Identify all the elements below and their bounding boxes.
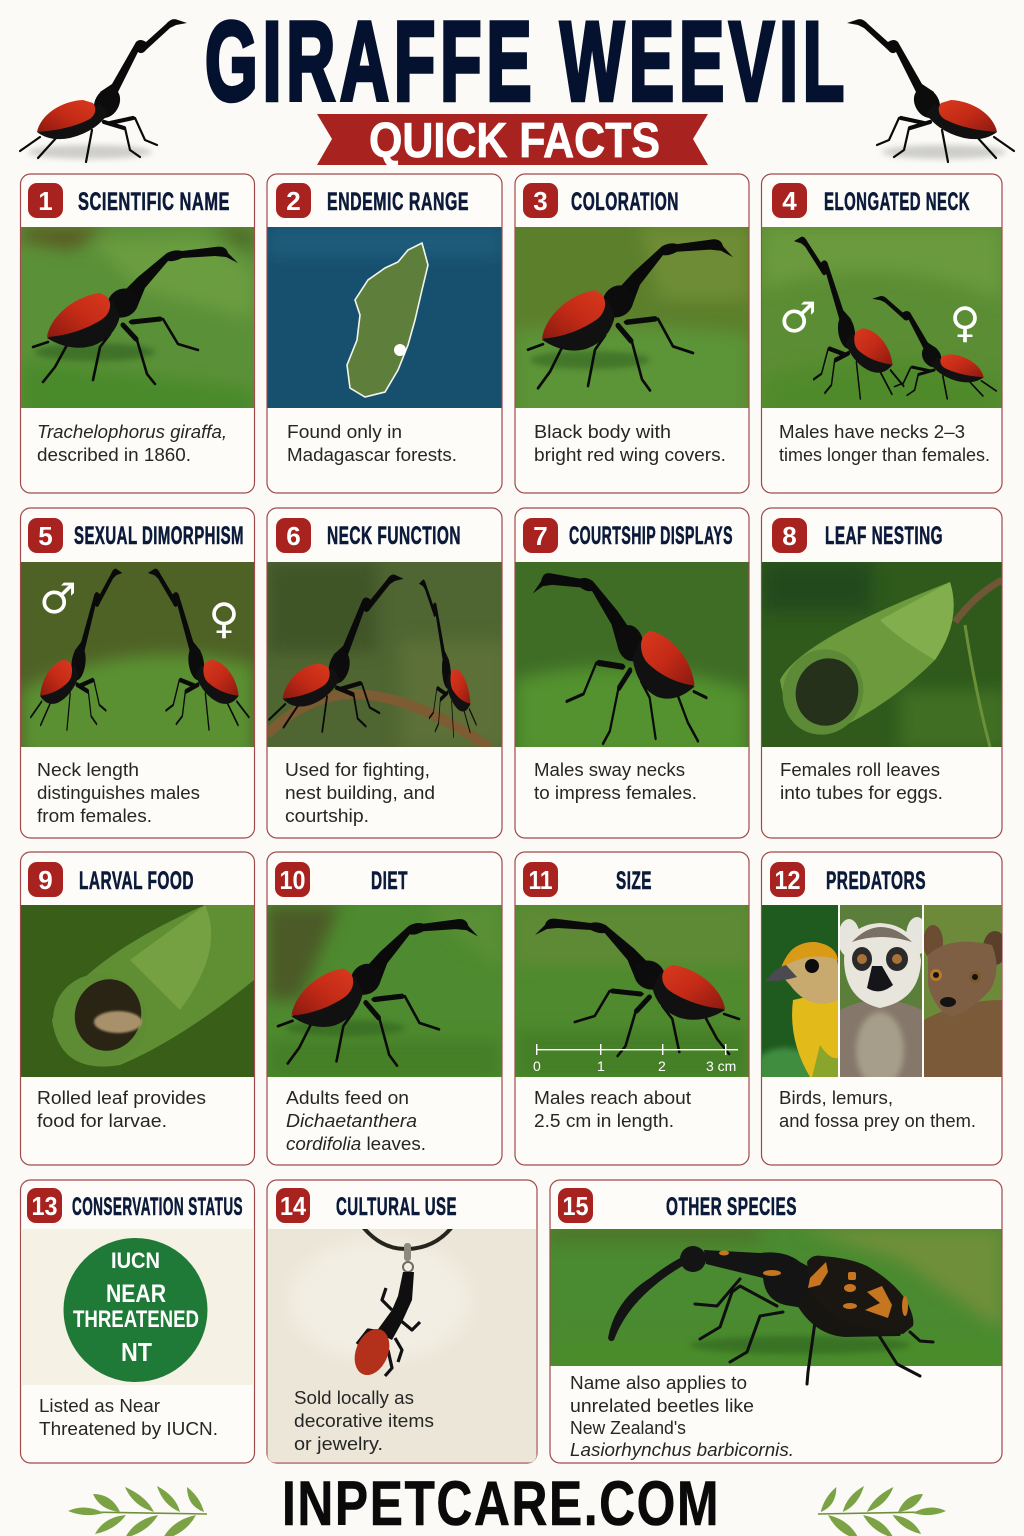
description: Rolled leaf provides bbox=[37, 1087, 206, 1108]
card frame bbox=[515, 508, 749, 838]
image: rolled leaf nest bbox=[762, 562, 1002, 747]
heading: CULTURAL USE bbox=[336, 1193, 457, 1221]
heading: LARVAL FOOD bbox=[79, 867, 194, 895]
symbol: male: ♂ bbox=[779, 293, 817, 342]
panel: 1 scientific name bbox=[20, 174, 254, 493]
IUCN status badge: NEAR bbox=[106, 1280, 166, 1308]
heading: SCIENTIFIC NAME bbox=[78, 188, 230, 216]
description: courtship. bbox=[285, 805, 369, 826]
number badge: 11 bbox=[528, 865, 552, 895]
description: Listed as Near bbox=[39, 1395, 160, 1416]
description: from females. bbox=[37, 805, 152, 826]
description: 2.5 cm in length. bbox=[534, 1110, 674, 1131]
icon: right leaf spray bbox=[818, 1486, 946, 1536]
heading: LEAF NESTING bbox=[825, 522, 943, 550]
description: Males reach about bbox=[534, 1087, 691, 1108]
number badge: 2 bbox=[286, 186, 301, 216]
image: weevil on leaf bbox=[516, 227, 748, 408]
card frame bbox=[267, 1180, 537, 1463]
image: fossa predator bbox=[924, 905, 1002, 1077]
card frame bbox=[20, 1180, 254, 1463]
panel: 3 coloration bbox=[515, 174, 749, 493]
number badge: 14 bbox=[280, 1191, 306, 1221]
card frame bbox=[267, 852, 502, 1165]
necklace cord bbox=[363, 1227, 452, 1249]
heading: SIZE bbox=[616, 867, 652, 895]
description: distinguishes males bbox=[37, 782, 200, 803]
card frame bbox=[762, 174, 1002, 493]
number badge: 6 bbox=[286, 521, 301, 551]
panel: 14 cultural use bbox=[267, 1180, 537, 1463]
heading: COLORATION bbox=[571, 188, 679, 216]
description bbox=[37, 759, 200, 826]
panel: 12 predators bbox=[753, 852, 1007, 1165]
description: Madagascar forests. bbox=[287, 444, 457, 465]
symbol: male: ♂ bbox=[39, 574, 77, 623]
icon: giraffe weevil left bbox=[20, 19, 187, 162]
card frame bbox=[762, 852, 1002, 1165]
number badge: 3 bbox=[533, 186, 548, 216]
image: weevil feeding on leaf bbox=[268, 905, 502, 1077]
IUCN status badge: THREATENED bbox=[73, 1306, 199, 1333]
number badge bbox=[523, 518, 558, 553]
ruler: 3 cm bbox=[706, 1058, 736, 1074]
description: Lasiorhynchus barbicornis. bbox=[570, 1439, 794, 1460]
image: leaf background bbox=[550, 1229, 1002, 1366]
number badge: 9 bbox=[38, 865, 53, 895]
number badge bbox=[28, 183, 63, 218]
pendant weevil bbox=[348, 1272, 420, 1380]
description bbox=[294, 1387, 434, 1454]
image: weevil on leaf bbox=[21, 227, 254, 408]
card frame bbox=[267, 174, 502, 493]
description: Found only in bbox=[287, 421, 402, 442]
description bbox=[534, 1087, 691, 1131]
description: Trachelophorus giraffa, bbox=[37, 421, 227, 442]
number badge bbox=[276, 518, 311, 553]
ruler bbox=[533, 1044, 738, 1074]
description: Females roll leaves bbox=[780, 759, 940, 780]
card frame bbox=[20, 174, 254, 493]
description: and fossa prey on them. bbox=[779, 1110, 976, 1131]
panel: 9 larval food bbox=[20, 852, 254, 1165]
panel: 6 neck function bbox=[267, 508, 510, 838]
description bbox=[780, 759, 943, 803]
ribbon: quick facts: QUICK FACTS bbox=[369, 114, 660, 168]
number badge bbox=[523, 183, 558, 218]
description: into tubes for eggs. bbox=[780, 782, 943, 803]
card frame bbox=[267, 508, 502, 838]
description: Birds, lemurs, bbox=[779, 1087, 893, 1108]
card frame bbox=[20, 852, 254, 1165]
image: weevil pendant on cream bbox=[268, 1229, 536, 1462]
panel: 11 size bbox=[515, 852, 749, 1165]
heading: CONSERVATION STATUS bbox=[72, 1193, 243, 1221]
number badge: 8 bbox=[782, 521, 797, 551]
heading: NECK FUNCTION bbox=[327, 522, 461, 550]
panel: 7 courtship displays bbox=[515, 508, 749, 838]
description bbox=[37, 1087, 206, 1131]
number badge: 12 bbox=[774, 865, 800, 895]
description: described in 1860. bbox=[37, 444, 191, 465]
image: male and female weevils bbox=[21, 562, 254, 747]
description: cordifolia leaves. bbox=[286, 1133, 426, 1154]
symbol: female: ♀ bbox=[209, 594, 239, 643]
icon: left leaf spray bbox=[68, 1486, 207, 1536]
illustration: barbicornis weevil bbox=[608, 1246, 933, 1384]
description: or jewelry. bbox=[294, 1433, 383, 1454]
description: Used for fighting, bbox=[285, 759, 430, 780]
panel: 5 sexual dimorphism bbox=[20, 508, 254, 838]
image: weevil with ruler bbox=[516, 905, 748, 1077]
image: bird predator bbox=[762, 905, 838, 1077]
header bbox=[20, 0, 1014, 168]
card frame bbox=[550, 1180, 1002, 1463]
description bbox=[779, 1087, 976, 1131]
number badge bbox=[772, 183, 807, 218]
ruler: 0 bbox=[533, 1058, 541, 1074]
description: Sold locally as bbox=[294, 1387, 414, 1408]
description bbox=[534, 759, 697, 803]
description: decorative items bbox=[294, 1410, 434, 1431]
map: Madagascar bbox=[268, 227, 502, 408]
panel: 4 elongated neck bbox=[762, 174, 1002, 493]
number badge: 13 bbox=[32, 1191, 58, 1221]
card frame bbox=[762, 508, 1002, 838]
panel: 2 endemic range bbox=[267, 174, 502, 493]
number badge bbox=[523, 862, 558, 897]
number badge: 10 bbox=[280, 865, 306, 895]
description: Males have necks 2–3 bbox=[779, 421, 965, 442]
description: Threatened by IUCN. bbox=[39, 1418, 218, 1439]
heading: OTHER SPECIES bbox=[666, 1193, 797, 1221]
number badge: 1 bbox=[38, 186, 53, 216]
description: Neck length bbox=[37, 759, 139, 780]
number badge bbox=[28, 518, 63, 553]
panel: 10 diet bbox=[267, 852, 502, 1165]
heading: COURTSHIP DISPLAYS bbox=[569, 522, 733, 550]
description: Males sway necks bbox=[534, 759, 685, 780]
description: to impress females. bbox=[534, 782, 697, 803]
description bbox=[534, 421, 726, 465]
number badge: 5 bbox=[38, 521, 53, 551]
IUCN status badge: IUCN bbox=[111, 1248, 160, 1273]
IUCN status badge bbox=[64, 1238, 208, 1382]
image: weevil swaying neck bbox=[516, 562, 748, 747]
IUCN status badge: NT bbox=[121, 1337, 152, 1367]
card frame bbox=[515, 852, 749, 1165]
description: Dichaetanthera bbox=[286, 1110, 417, 1131]
card frame bbox=[20, 508, 254, 838]
heading: PREDATORS bbox=[826, 867, 926, 895]
description bbox=[570, 1372, 794, 1460]
heading: DIET bbox=[371, 867, 408, 895]
description bbox=[285, 759, 435, 826]
number badge: 7 bbox=[533, 521, 548, 551]
image: male and female weevils bbox=[762, 227, 1002, 408]
description bbox=[286, 1087, 426, 1154]
description: nest building, and bbox=[285, 782, 435, 803]
description: bright red wing covers. bbox=[534, 444, 726, 465]
number badge bbox=[772, 518, 807, 553]
description bbox=[37, 421, 227, 465]
description bbox=[39, 1395, 218, 1439]
description: food for larvae. bbox=[37, 1110, 167, 1131]
ruler: 2 bbox=[658, 1058, 666, 1074]
description: Adults feed on bbox=[286, 1087, 409, 1108]
description bbox=[779, 421, 990, 465]
description: Name also applies to bbox=[570, 1372, 747, 1393]
heading: SEXUAL DIMORPHISM bbox=[74, 522, 244, 550]
description: unrelated beetles like bbox=[570, 1395, 754, 1416]
ruler: 1 bbox=[597, 1058, 605, 1074]
number badge bbox=[28, 862, 63, 897]
number badge bbox=[276, 183, 311, 218]
image: two weevils on branch bbox=[268, 562, 502, 747]
panel: 15 other species bbox=[550, 1180, 1002, 1463]
image: larva inside rolled leaf bbox=[21, 905, 254, 1077]
footer bbox=[68, 1469, 946, 1536]
description: Black body with bbox=[534, 421, 671, 442]
card frame bbox=[515, 174, 749, 493]
panel: 8 leaf nesting bbox=[762, 508, 1010, 838]
description bbox=[287, 421, 457, 465]
number badge: 4 bbox=[782, 186, 797, 216]
image background: cream bbox=[21, 1229, 254, 1385]
icon: giraffe weevil right bbox=[847, 19, 1014, 162]
panel: 13 conservation status bbox=[20, 1180, 254, 1463]
number badge: 15 bbox=[562, 1191, 588, 1221]
description: times longer than females. bbox=[779, 444, 990, 465]
heading: ENDEMIC RANGE bbox=[327, 188, 469, 216]
image: lemur predator bbox=[840, 905, 922, 1077]
description: New Zealand's bbox=[570, 1417, 686, 1438]
symbol: female: ♀ bbox=[950, 298, 980, 347]
